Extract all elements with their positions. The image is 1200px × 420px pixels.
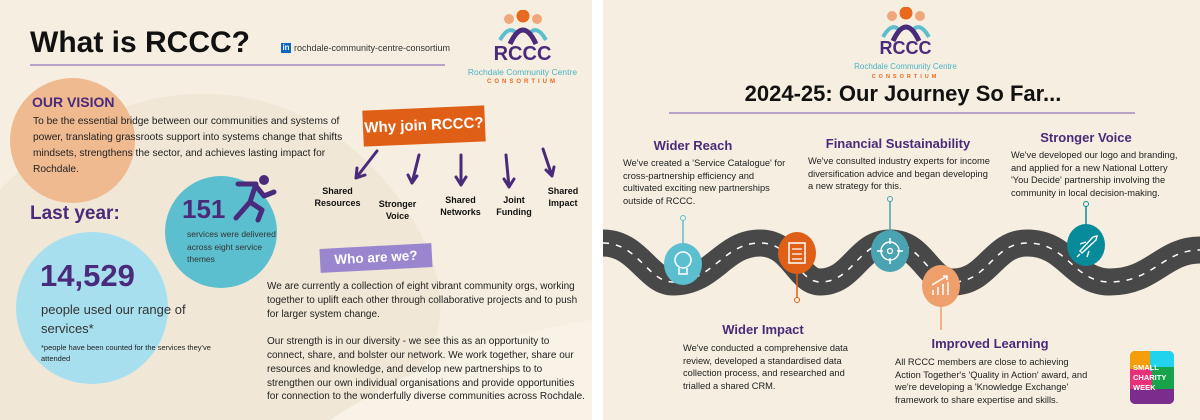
icon: target [871,196,909,272]
milestone: stronger voice: Stronger Voice [1040,130,1132,145]
logo left: CONSORTIUM [487,79,558,85]
panel: left what is RCCC: people used our range of services* [41,302,186,336]
milestone: improved learning: All RCCC members are close to achieving Action Together's 'Quality in Action' award, and we're developing a 'Knowledge Exchange' framework to share expertise and skills. [895,357,1087,404]
benefit labels [314,186,578,221]
milestone: wider impact: Wider Impact [722,322,804,337]
vision heading: OUR VISION [32,94,114,110]
icon: rocket [1067,202,1105,266]
who are we tag: Who are we? [334,248,418,267]
milestone: wider reach: We've created a 'Service Catalogue' for cross-partnership efficiency and cultivated exciting new partnerships outside of RCCC. [623,158,785,206]
circle stat 151: services were delivered across eight service themes [187,229,276,264]
icon: growth chart [922,265,960,330]
road with icons [603,196,1200,330]
who are we text: Our strength is in our diversity - we see this as an opportunity to connect, share, and bolster our network. We work together, share our resources and knowledge, and develop new partnerships to to strengthen our own individual organisations and provide opportunities for connection to the wonderfully diverse communities across Rochdale. [267,336,585,402]
logo right: Rochdale Community Centre [854,62,957,71]
logo left: RCCC [494,43,551,65]
badge: small charity week: CHARITY [1133,373,1166,382]
circle stat 151 [165,176,277,288]
benefit labels: Stronger Voice [379,199,416,221]
benefit labels: Joint Funding [496,195,532,217]
logo left [468,10,577,85]
milestone: stronger voice [1011,130,1178,198]
panel: left what is RCCC: *people have been counted for the services they've attended [41,343,211,363]
badge: small charity week: WEEK [1133,383,1156,392]
who are we tag [319,243,433,273]
panel: left what is RCCC [0,0,592,420]
panel: left what is RCCC: 14,529 [40,258,135,293]
logo left: Rochdale Community Centre [468,67,577,77]
milestone: stronger voice: We've developed our logo and branding, and applied for a new National Lottery 'You Decide' partnership involving the community in local decision-making. [1011,150,1178,198]
milestone: financial sustainability: We've consulted industry experts for income diversification advice and began developing a new strategy for this. [808,156,990,191]
icon: clipboard [778,232,816,302]
logo right [854,7,957,80]
who are we text: We are currently a collection of eight vibrant community orgs, working together to uplift each other through collaborative projects and to push for larger system change. [267,281,577,320]
why join banner [362,105,486,147]
logo right: CONSORTIUM [872,74,939,80]
circle stat 14,529 [16,232,168,384]
benefit labels: Shared Networks [440,195,481,217]
milestone: financial sustainability [808,136,990,191]
linkedin link: rochdale-community-centre-consortium [294,43,450,53]
logo right: RCCC [880,38,932,58]
milestone: wider impact: We've conducted a comprehensive data review, developed a standardised data collection process, and researched and trialled a shared CRM. [683,343,848,390]
title: What is RCCC? [30,26,250,59]
milestone: improved learning [895,336,1087,405]
panel: right journey [603,0,1200,420]
milestone: wider impact [683,322,848,390]
circle stat 151: 151 [182,194,225,224]
milestone: financial sustainability: Financial Sustainability [826,136,970,151]
badge: small charity week: SMALL [1133,363,1159,372]
linkedin link: in [282,43,290,52]
last year heading: Last year: [30,203,120,224]
why join banner: Why join RCCC? [364,114,484,137]
icon: runner [234,175,276,222]
badge: small charity week [1130,351,1174,404]
milestone: improved learning: Improved Learning [931,336,1049,351]
arrows benefits [354,148,556,189]
benefit labels: Shared Impact [548,186,578,208]
circle: vision background [10,78,135,203]
title right: 2024-25: Our Journey So Far... [745,81,1061,106]
who are we text [267,281,585,402]
vision text: To be the essential bridge between our communities and systems of power, translating grassroots support into systems change that shifts mindsets, strengthens the sector, and achieves lasting impact for Rochdale. [33,116,342,175]
icon: lightbulb [664,216,702,285]
benefit labels: Shared Resources [314,186,361,208]
milestone: wider reach: Wider Reach [654,138,732,153]
